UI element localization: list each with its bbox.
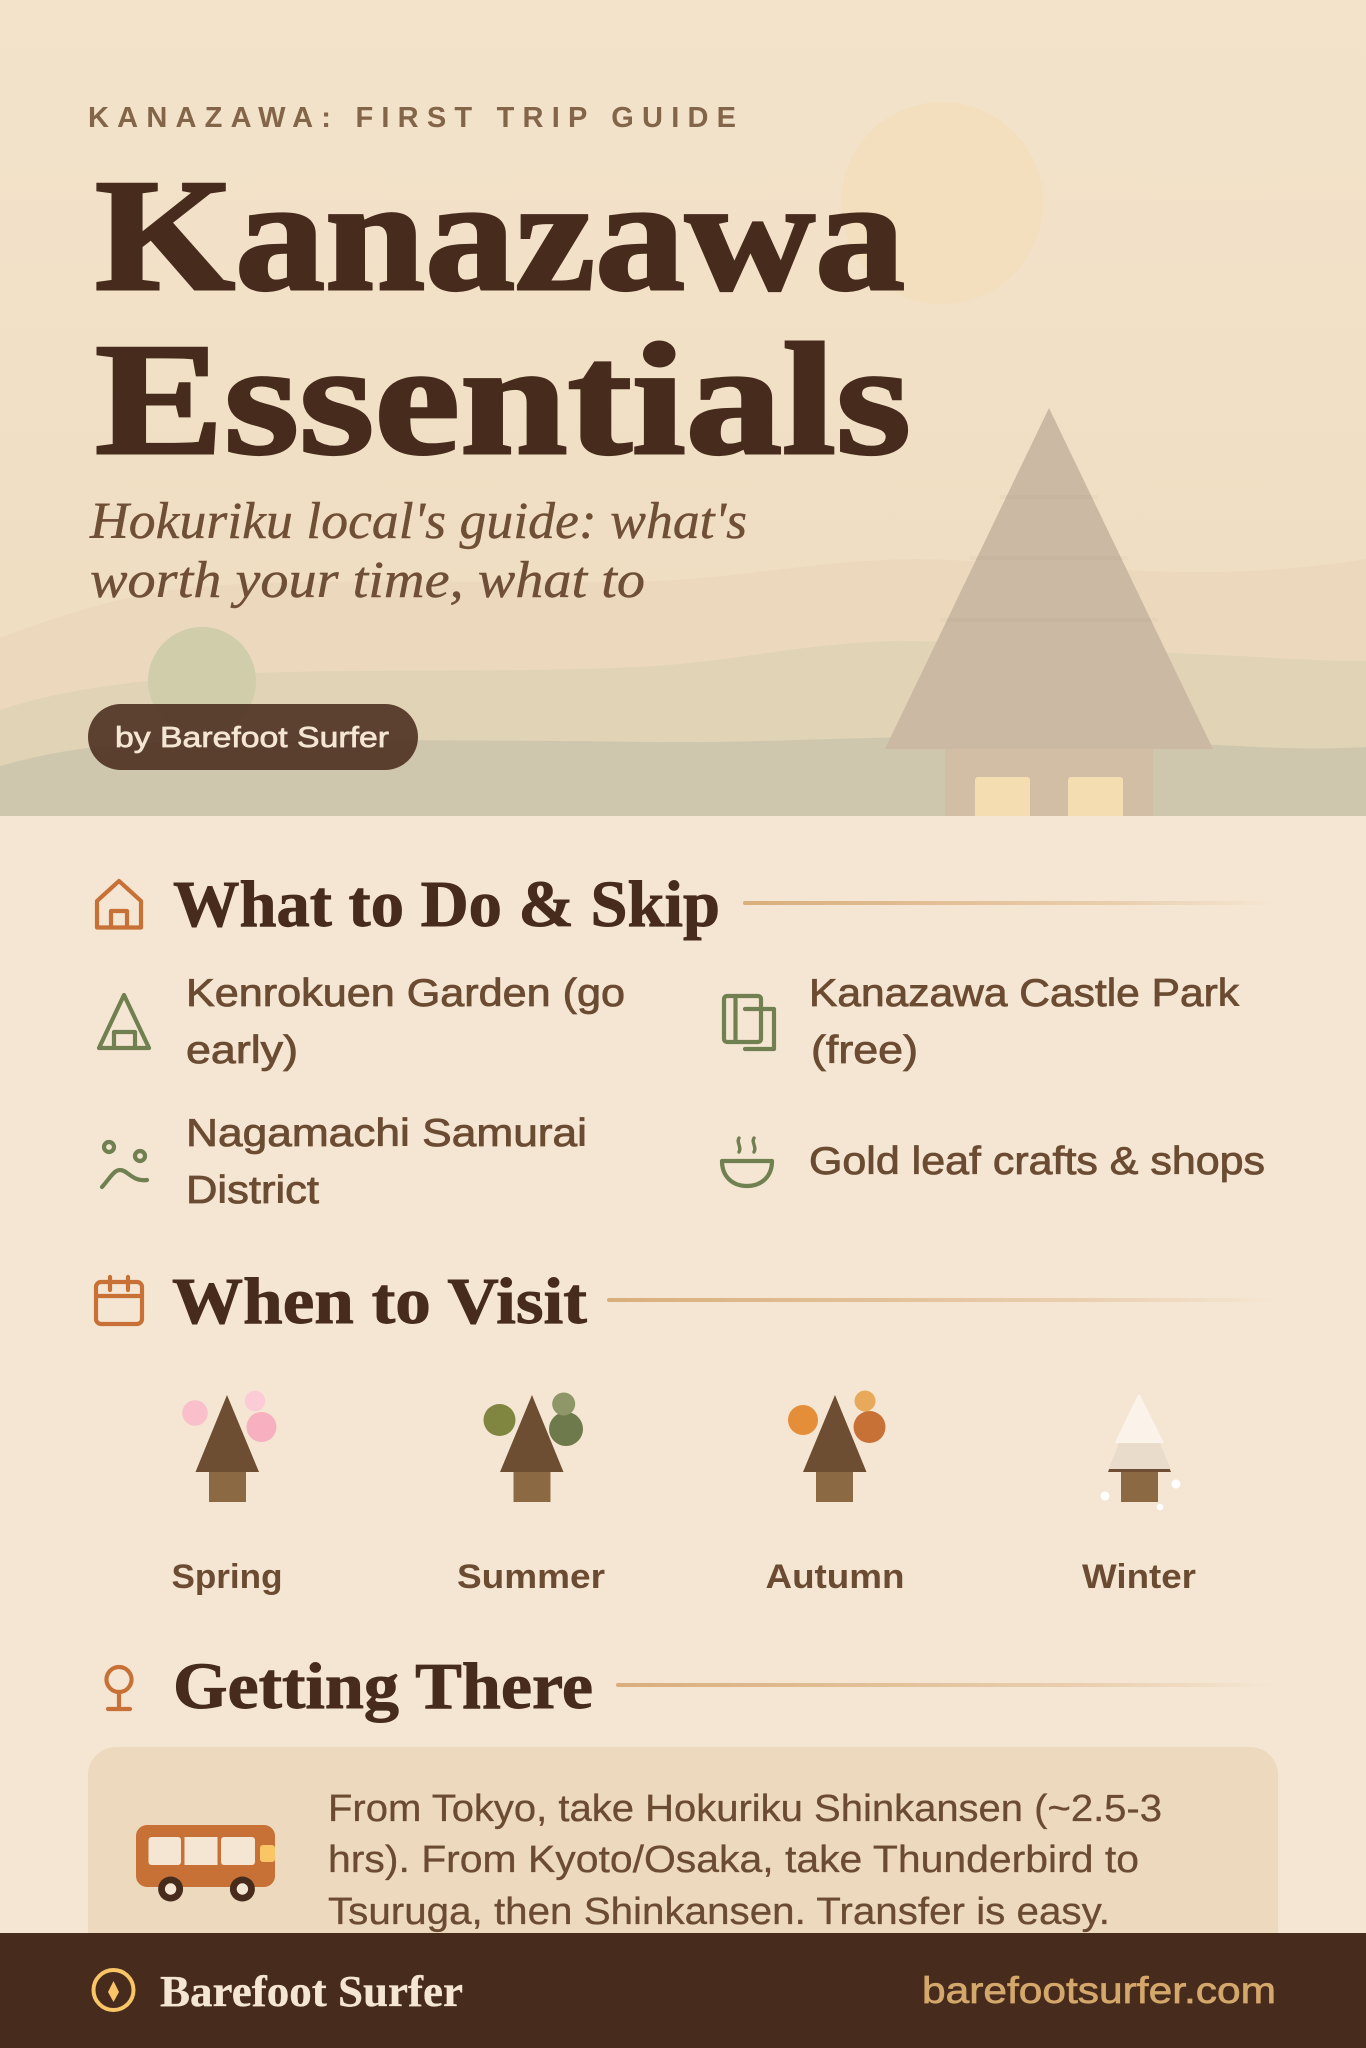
item: nagamachi: District <box>186 1169 319 1212</box>
text: route description: hrs). From Kyoto/Osaka, take Thunderbird to <box>328 1839 1139 1881</box>
section: getting there <box>88 1650 1278 2007</box>
section: what to do and skip <box>97 868 1278 1212</box>
author pill: by Barefoot Surfer <box>115 722 389 754</box>
green bush circle <box>148 627 256 704</box>
heading: when to visit: When to Visit <box>172 1265 587 1338</box>
title: Essentials <box>95 310 911 488</box>
middle hill <box>0 641 1366 766</box>
text: route description: From Tokyo, take Hokuriku Shinkansen (~2.5-3 <box>328 1788 1162 1830</box>
season: summer: Summer <box>457 1558 605 1596</box>
season: winter: Winter <box>1082 1558 1196 1596</box>
item: castle park: (free) <box>811 1029 918 1072</box>
front hill <box>0 737 1366 816</box>
season: winter <box>1082 1393 1196 1596</box>
back hill <box>0 559 1366 816</box>
icon: castle pages <box>724 996 774 1049</box>
icon: garden stones and wave <box>102 1142 147 1187</box>
hut silhouette <box>885 408 1213 816</box>
item: nagamachi <box>186 1112 587 1212</box>
item: kenrokuen: early) <box>186 1029 298 1072</box>
text: route description <box>328 1788 1162 1933</box>
title <box>96 182 908 456</box>
hero panel <box>0 0 1366 816</box>
icon: bus <box>136 1825 275 1902</box>
icon: house <box>97 881 141 928</box>
item: kenrokuen: Kenrokuen Garden (go <box>186 972 625 1015</box>
heading: what to do and skip: What to Do & Skip <box>173 868 720 941</box>
item: castle park: Kanazawa Castle Park <box>809 972 1240 1015</box>
item: nagamachi: Nagamachi Samurai <box>186 1112 587 1155</box>
season: autumn: Autumn <box>766 1558 904 1596</box>
text: route description: Tsuruga, then Shinkansen. Transfer is easy. <box>328 1891 1110 1933</box>
heading: getting there: Getting There <box>173 1650 593 1723</box>
author pill <box>88 704 418 770</box>
season: spring: Spring <box>172 1558 282 1596</box>
season: summer <box>457 1392 605 1596</box>
subtitle <box>89 493 747 609</box>
subtitle: Hokuriku local's guide: what's <box>89 493 747 550</box>
panel: transport card <box>88 1747 1278 2007</box>
season: autumn <box>766 1390 904 1596</box>
item: kenrokuen <box>186 972 625 1072</box>
section: when to visit <box>96 1265 1278 1596</box>
item: gold leaf: Gold leaf crafts & shops <box>809 1140 1265 1183</box>
icon: steaming bowl <box>722 1138 772 1186</box>
website: barefootsurfer.com <box>922 1970 1276 2011</box>
eyebrow label: KANAZAWA: FIRST TRIP GUIDE <box>88 102 736 134</box>
icon: calendar <box>96 1277 142 1324</box>
item: castle park <box>809 972 1240 1072</box>
icon: compass <box>94 1970 134 2010</box>
icon: hut <box>99 995 149 1048</box>
title: Kanazawa <box>95 146 905 324</box>
icon: map pin <box>106 1667 131 1709</box>
footer bar <box>0 1933 1366 2048</box>
sun circle <box>841 102 1043 304</box>
season: spring <box>172 1391 282 1596</box>
subtitle: worth your time, what to <box>90 552 645 609</box>
brand name: Barefoot Surfer <box>160 1967 463 2016</box>
